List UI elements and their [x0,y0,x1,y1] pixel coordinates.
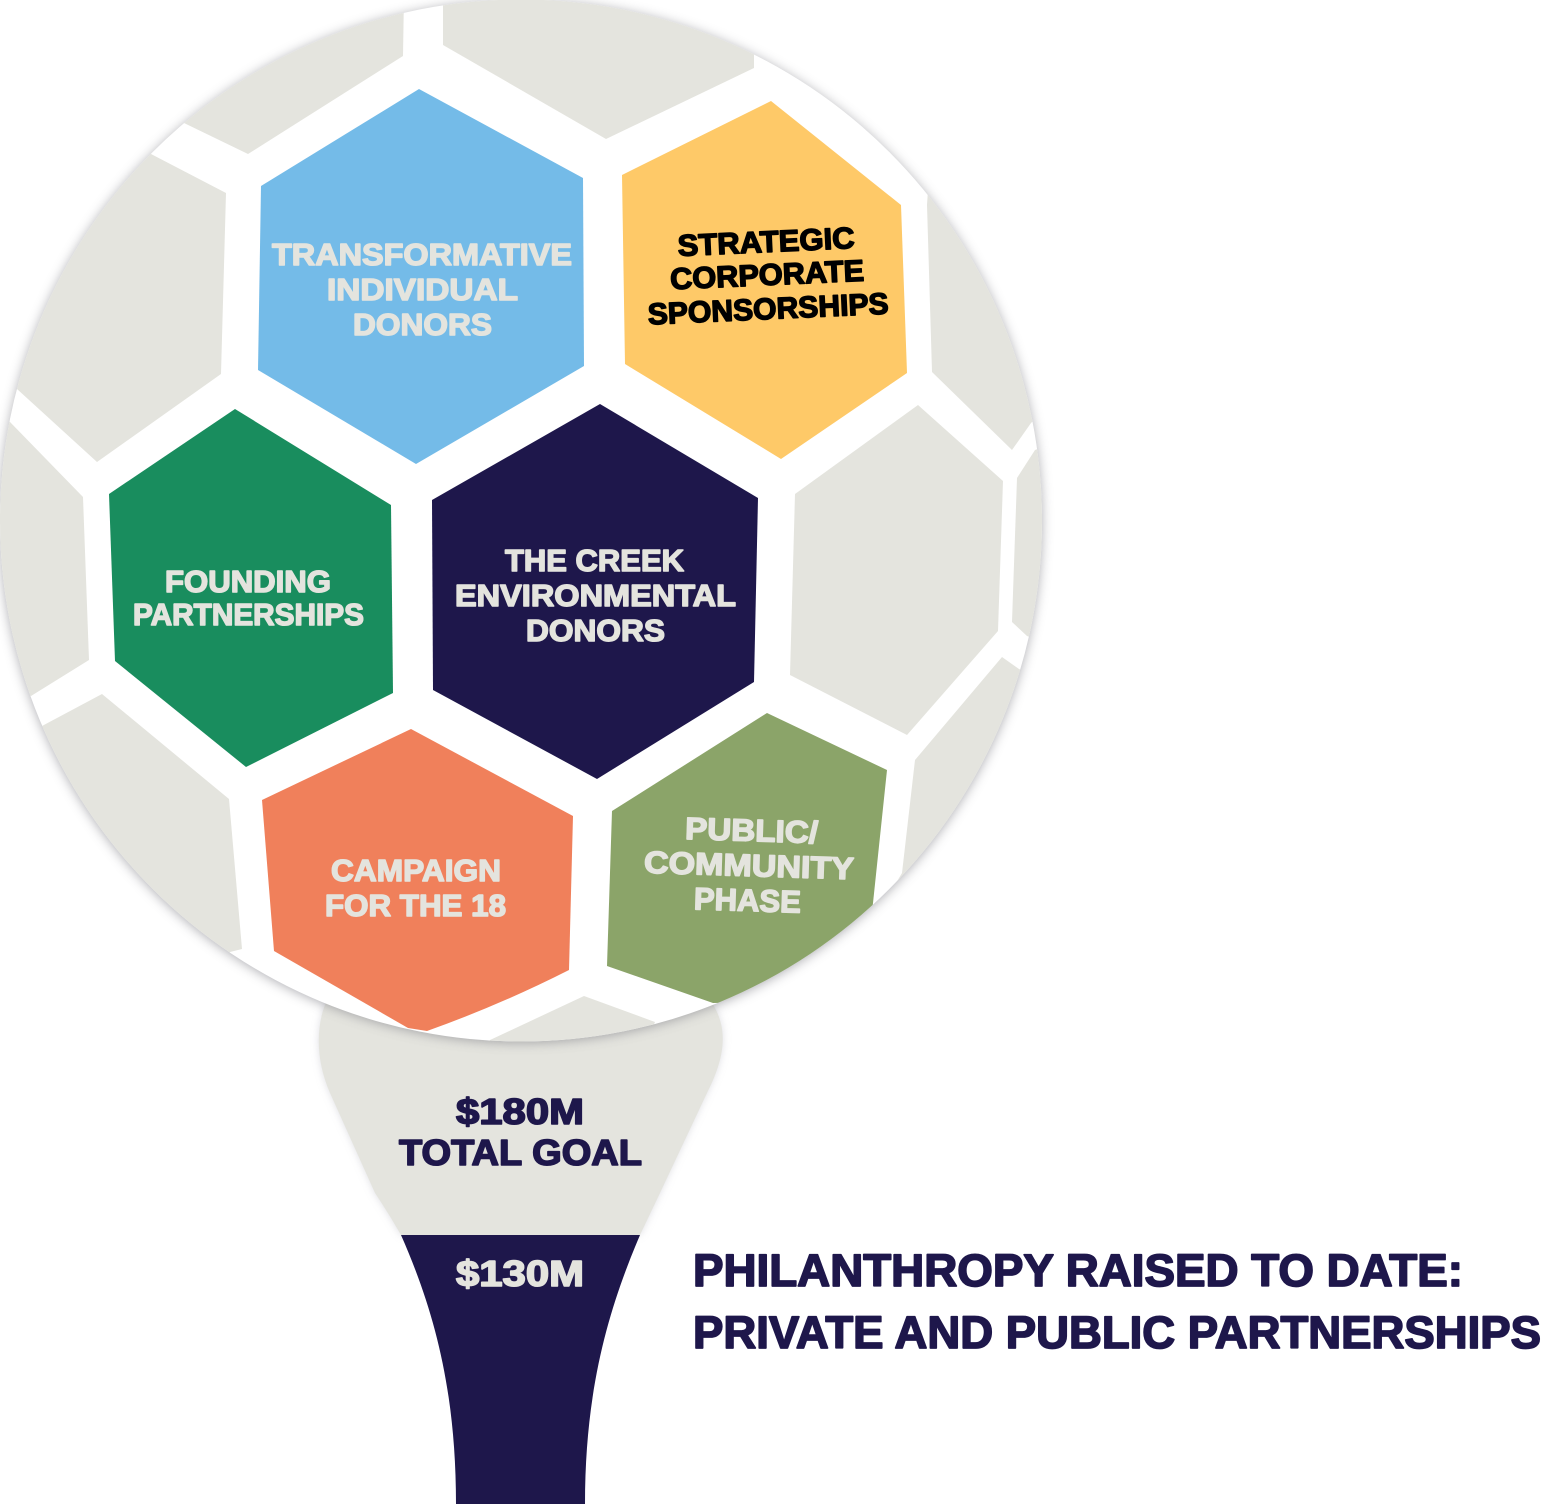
hexagon: public community phase [607,713,887,1003]
hexagon: the creek environmental donors [432,404,758,779]
total goal label: $180M [456,1091,584,1132]
hexagon: campaign for the 18 [262,729,573,1031]
label: strategic corporate sponsorships: CORPORATE [669,255,865,296]
hexagon: founding partnerships [109,409,393,767]
hexagon: transformative individual donors [258,89,584,464]
label: campaign for the 18 [325,853,506,923]
tee upper: total goal [319,1000,723,1235]
raised amount label: $130M [456,1253,584,1294]
label: the creek environmental donors: DONORS [526,613,665,648]
tee lower: raised to date [401,1235,640,1504]
label: the creek environmental donors [455,543,736,648]
label: strategic corporate sponsorships: STRATEGIC [677,222,855,263]
label: transformative individual donors: TRANSFORMATIVE [272,237,572,272]
label: campaign for the 18: FOR THE 18 [325,888,506,923]
ball shadow [1,2,1041,1042]
heading: PRIVATE AND PUBLIC PARTNERSHIPS [693,1307,1541,1358]
heading: PHILANTHROPY RAISED TO DATE: [693,1245,1463,1296]
label: public community phase: PUBLIC/ [685,811,819,850]
label: campaign for the 18: CAMPAIGN [331,853,501,888]
hexagon: strategic corporate sponsorships [622,101,907,459]
label: founding partnerships: PARTNERSHIPS [133,597,364,632]
label: public community phase [642,810,856,921]
golf tee [319,1000,723,1504]
label: transformative individual donors [272,237,572,342]
label: public community phase: PHASE [693,881,801,920]
label: transformative individual donors: DONORS [353,307,492,342]
label: founding partnerships: FOUNDING [165,564,331,599]
label: strategic corporate sponsorships [644,221,889,331]
label: public community phase: COMMUNITY [644,845,855,886]
label: the creek environmental donors: THE CREEK [505,543,685,578]
total goal label [399,1091,642,1173]
grey dimple panels [0,0,1060,1060]
heading [693,1245,1541,1358]
label: transformative individual donors: INDIVIDUAL [327,272,518,307]
label: founding partnerships [133,564,364,632]
label: the creek environmental donors: ENVIRONMENTAL [455,578,736,613]
total goal label: TOTAL GOAL [399,1132,642,1173]
golf ball [0,0,1060,1060]
label: strategic corporate sponsorships: SPONSORSHIPS [647,288,889,331]
